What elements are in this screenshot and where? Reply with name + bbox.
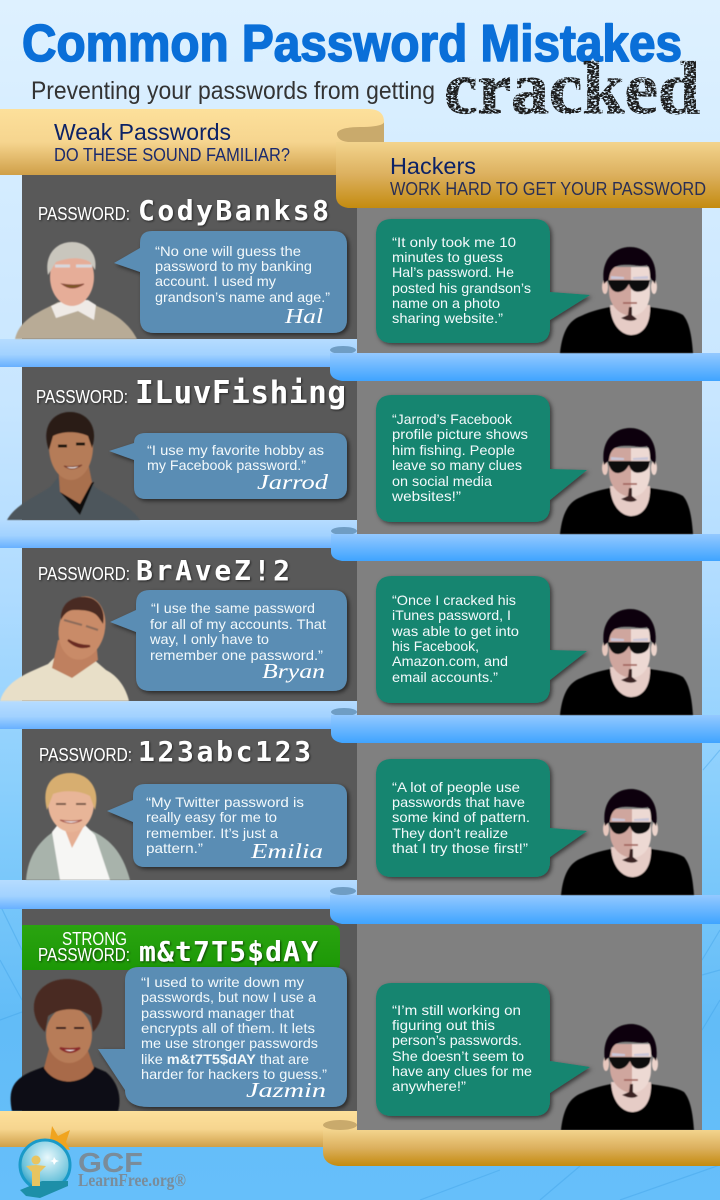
- subtitle: [31, 48, 700, 130]
- speech bubble: Bryan: way, I only have to: [149, 631, 269, 647]
- speech bubble: hacker on Jazmin: figuring out this: [392, 1017, 495, 1033]
- speech bubble: hacker on Bryan: iTunes password, I: [392, 607, 511, 623]
- speech bubble: Jazmin: Jazmin: [246, 1078, 326, 1102]
- password row 3: BrAveZ!2: [136, 554, 290, 587]
- portrait: Jarrod: [7, 412, 140, 520]
- speech bubble: hacker on Bryan: [376, 576, 587, 703]
- password row 1: PASSWORD:: [38, 204, 130, 224]
- logo: GCF LearnFree.org: [20, 1126, 186, 1198]
- speech bubble: Jazmin: like m&t7T5$dAY that are: [141, 1051, 309, 1067]
- speech bubble: hacker on Jarrod: [376, 395, 587, 522]
- speech bubble: hacker on Emilia: that I try those first!”: [392, 840, 528, 856]
- speech bubble: Jazmin: [98, 967, 347, 1107]
- speech bubble: Jazmin: password manager that: [141, 1005, 294, 1021]
- speech bubble: Hal: grandson’s name and age.”: [155, 289, 330, 305]
- speech bubble: Jazmin: “I used to write down my: [141, 974, 304, 990]
- speech bubble: Hal: [114, 231, 347, 333]
- speech bubble: hacker on Hal: posted his grandson’s: [392, 280, 531, 296]
- speech bubble: hacker on Bryan: Amazon.com, and: [392, 653, 508, 669]
- speech bubble: hacker on Hal: “It only took me 10: [392, 234, 516, 250]
- speech bubble: hacker on Jazmin: anywhere!”: [392, 1078, 466, 1094]
- divider ribbon: row 2: [0, 520, 720, 561]
- speech bubble: hacker on Hal: [376, 219, 590, 343]
- portrait: hacker row 3: [560, 609, 693, 715]
- speech bubble: Jarrod: [109, 433, 347, 499]
- speech bubble: hacker on Hal: sharing website.”: [392, 310, 503, 326]
- title: Common Password Mistakes: [22, 15, 682, 73]
- speech bubble: hacker on Emilia: “A lot of people use: [392, 779, 520, 795]
- strong password bar: STRONG: [62, 929, 127, 949]
- speech bubble: hacker on Bryan: his Facebook,: [392, 638, 479, 654]
- speech bubble: hacker on Emilia: passwords that have: [392, 794, 525, 810]
- heading: weak passwords: [54, 119, 290, 165]
- speech bubble: hacker on Emilia: They don’t realize: [392, 825, 508, 841]
- heading: hackers: [390, 153, 706, 199]
- panel: hackers column row 5 background: [357, 924, 702, 1130]
- speech bubble: hacker on Emilia: [376, 759, 587, 877]
- speech bubble: Jarrod: “I use my favorite hobby as: [147, 442, 324, 458]
- speech bubble: Emilia: remember. It’s just a: [146, 825, 278, 841]
- speech bubble: hacker on Hal: minutes to guess: [392, 249, 503, 265]
- panel: weak column row 4 background: [22, 729, 357, 880]
- speech bubble: hacker on Jarrod: websites!”: [391, 488, 461, 504]
- footer ribbon: [0, 1111, 720, 1166]
- password row 1: CodyBanks8: [138, 194, 329, 227]
- portrait: Jazmin: [11, 979, 119, 1111]
- strong password bar: [22, 925, 340, 970]
- speech bubble: hacker on Bryan: email accounts.”: [392, 669, 498, 685]
- password row 4: 123abc123: [138, 735, 311, 768]
- speech bubble: Bryan: “I use the same password: [151, 600, 315, 616]
- strong password bar: m&t7T5$dAY: [139, 935, 318, 968]
- password row 3: [38, 554, 290, 587]
- portrait: Hal: [15, 242, 137, 339]
- icon: globe with figure and star: [20, 1126, 70, 1198]
- speech bubble: hacker on Hal: Hal’s password. He: [392, 264, 514, 280]
- panel: strong column row 5 background: [22, 909, 357, 1111]
- panel: weak column row 3 background: [22, 548, 357, 701]
- speech bubble: Hal: Hal: [284, 304, 323, 328]
- password row 4: [39, 735, 311, 768]
- speech bubble: hacker on Jarrod: on social media: [392, 473, 492, 489]
- speech bubble: Bryan: remember one password.”: [150, 647, 323, 663]
- speech bubble: Emilia: really easy for me to: [146, 809, 277, 825]
- speech bubble: hacker on Bryan: was able to get into: [391, 623, 519, 639]
- speech bubble: hacker on Jarrod: profile picture shows: [392, 426, 528, 442]
- speech bubble: Emilia: [107, 784, 347, 867]
- speech bubble: Hal: “No one will guess the: [155, 243, 301, 259]
- speech bubble: Jazmin: passwords, but now I use a: [141, 989, 316, 1005]
- portrait: hacker row 2: [560, 428, 693, 534]
- panel: weak column row 2 background: [22, 367, 357, 520]
- speech bubble: Jarrod: my Facebook password.”: [147, 457, 306, 473]
- speech bubble: Jazmin: me use stronger passwords: [141, 1035, 318, 1051]
- subtitle: cracked: [444, 48, 700, 130]
- portrait: hacker row 1: [560, 247, 693, 353]
- speech bubble: hacker on Jazmin: person’s passwords.: [392, 1032, 522, 1048]
- speech bubble: Emilia: Emilia: [250, 839, 323, 863]
- divider ribbon: row 3: [0, 701, 720, 743]
- speech bubble: Bryan: Bryan: [262, 659, 325, 683]
- speech bubble: hacker on Bryan: “Once I cracked his: [392, 592, 516, 608]
- heading: weak passwords: DO THESE SOUND FAMILIAR?: [54, 145, 290, 165]
- divider ribbon: row 4: [0, 880, 720, 924]
- speech bubble: Emilia: pattern.”: [146, 840, 203, 856]
- speech bubble: Hal: account. I used my: [155, 273, 276, 289]
- speech bubble: Hal: password to my banking: [155, 258, 312, 274]
- banner: hackers ribbon: [336, 142, 720, 208]
- speech bubble: hacker on Emilia: some kind of pattern.: [392, 809, 530, 825]
- panel: hackers column row 2 background: [357, 381, 702, 534]
- speech bubble: hacker on Jazmin: She doesn’t seem to: [392, 1048, 524, 1064]
- speech bubble: Jazmin: encrypts all of them. It lets: [141, 1020, 315, 1036]
- portrait: Bryan: [0, 592, 129, 701]
- password row 1: [38, 194, 329, 227]
- panel: weak column row 1 background: [22, 175, 357, 339]
- speech bubble: Bryan: [110, 590, 347, 691]
- subtitle: Preventing your passwords from getting: [31, 77, 435, 105]
- speech bubble: hacker on Jarrod: him fishing. People: [392, 442, 515, 458]
- password row 2: PASSWORD:: [36, 387, 128, 407]
- speech bubble: hacker on Jazmin: have any clues for me: [392, 1063, 532, 1079]
- divider ribbon: row 1: [0, 339, 720, 381]
- panel: hackers column row 3 background: [357, 561, 702, 715]
- speech bubble: hacker on Hal: name on a photo: [392, 295, 500, 311]
- heading: hackers: Hackers: [390, 153, 476, 179]
- banner: weak passwords ribbon: [0, 109, 384, 175]
- portrait: hacker row 5: [561, 1024, 694, 1130]
- logo: GCF LearnFree.org: GCF: [78, 1147, 143, 1178]
- password row 3: PASSWORD:: [38, 564, 130, 584]
- speech bubble: hacker on Jarrod: “Jarrod’s Facebook: [392, 411, 513, 427]
- speech bubble: hacker on Jazmin: “I’m still working on: [392, 1002, 521, 1018]
- panel: hackers column row 4 background: [357, 743, 702, 895]
- password row 4: PASSWORD:: [39, 745, 132, 765]
- portrait: Emilia: [26, 773, 130, 880]
- logo: GCF LearnFree.org: LearnFree.org®: [78, 1170, 186, 1190]
- speech bubble: Jarrod: Jarrod: [257, 470, 329, 494]
- speech bubble: Jazmin: harder for hackers to guess.”: [141, 1066, 327, 1082]
- password row 2: [36, 375, 346, 411]
- speech bubble: hacker on Jazmin: [376, 983, 590, 1116]
- speech bubble: Bryan: for all of my accounts. That: [150, 616, 326, 632]
- password row 2: ILuvFishing: [135, 375, 346, 411]
- portrait: hacker row 4: [561, 789, 694, 895]
- speech bubble: Emilia: “My Twitter password is: [146, 794, 304, 810]
- strong password bar: PASSWORD:: [38, 945, 130, 965]
- speech bubble: hacker on Jarrod: leave so many clues: [392, 457, 522, 473]
- panel: hackers column row 1 background: [357, 208, 702, 353]
- heading: weak passwords: Weak Passwords: [54, 119, 231, 145]
